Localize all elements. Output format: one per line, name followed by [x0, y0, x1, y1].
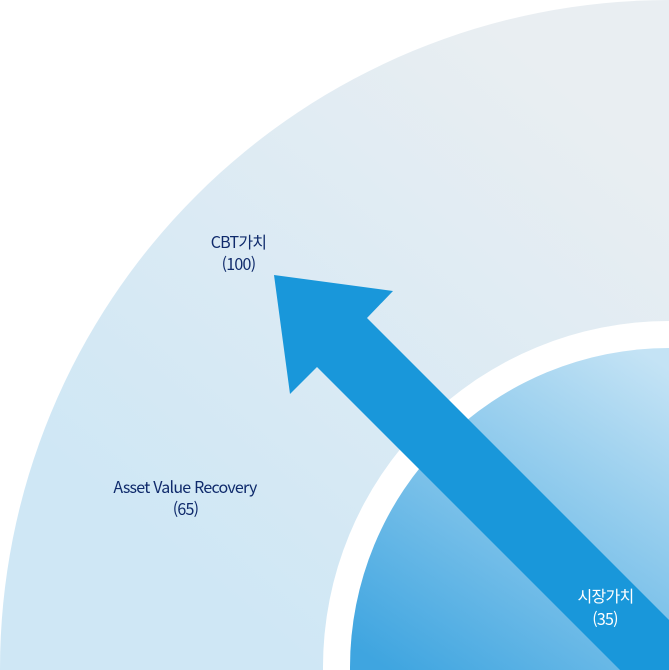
arrow: growth from market value to CBT value — [274, 275, 669, 670]
label: CBT value — [211, 229, 266, 275]
label: market value — [578, 583, 633, 630]
label: CBT value: (100) — [222, 251, 255, 275]
white ring — [323, 321, 669, 670]
label: Asset Value Recovery: Asset Value Recovery — [113, 474, 258, 498]
label: Asset Value Recovery: (65) — [173, 496, 198, 520]
label: market value: (35) — [592, 606, 618, 630]
label: CBT value: CBT가치 — [211, 229, 266, 253]
label: market value: 시장가치 — [578, 583, 633, 607]
label: Asset Value Recovery — [113, 474, 258, 520]
inner quadrant: market value — [350, 348, 669, 670]
